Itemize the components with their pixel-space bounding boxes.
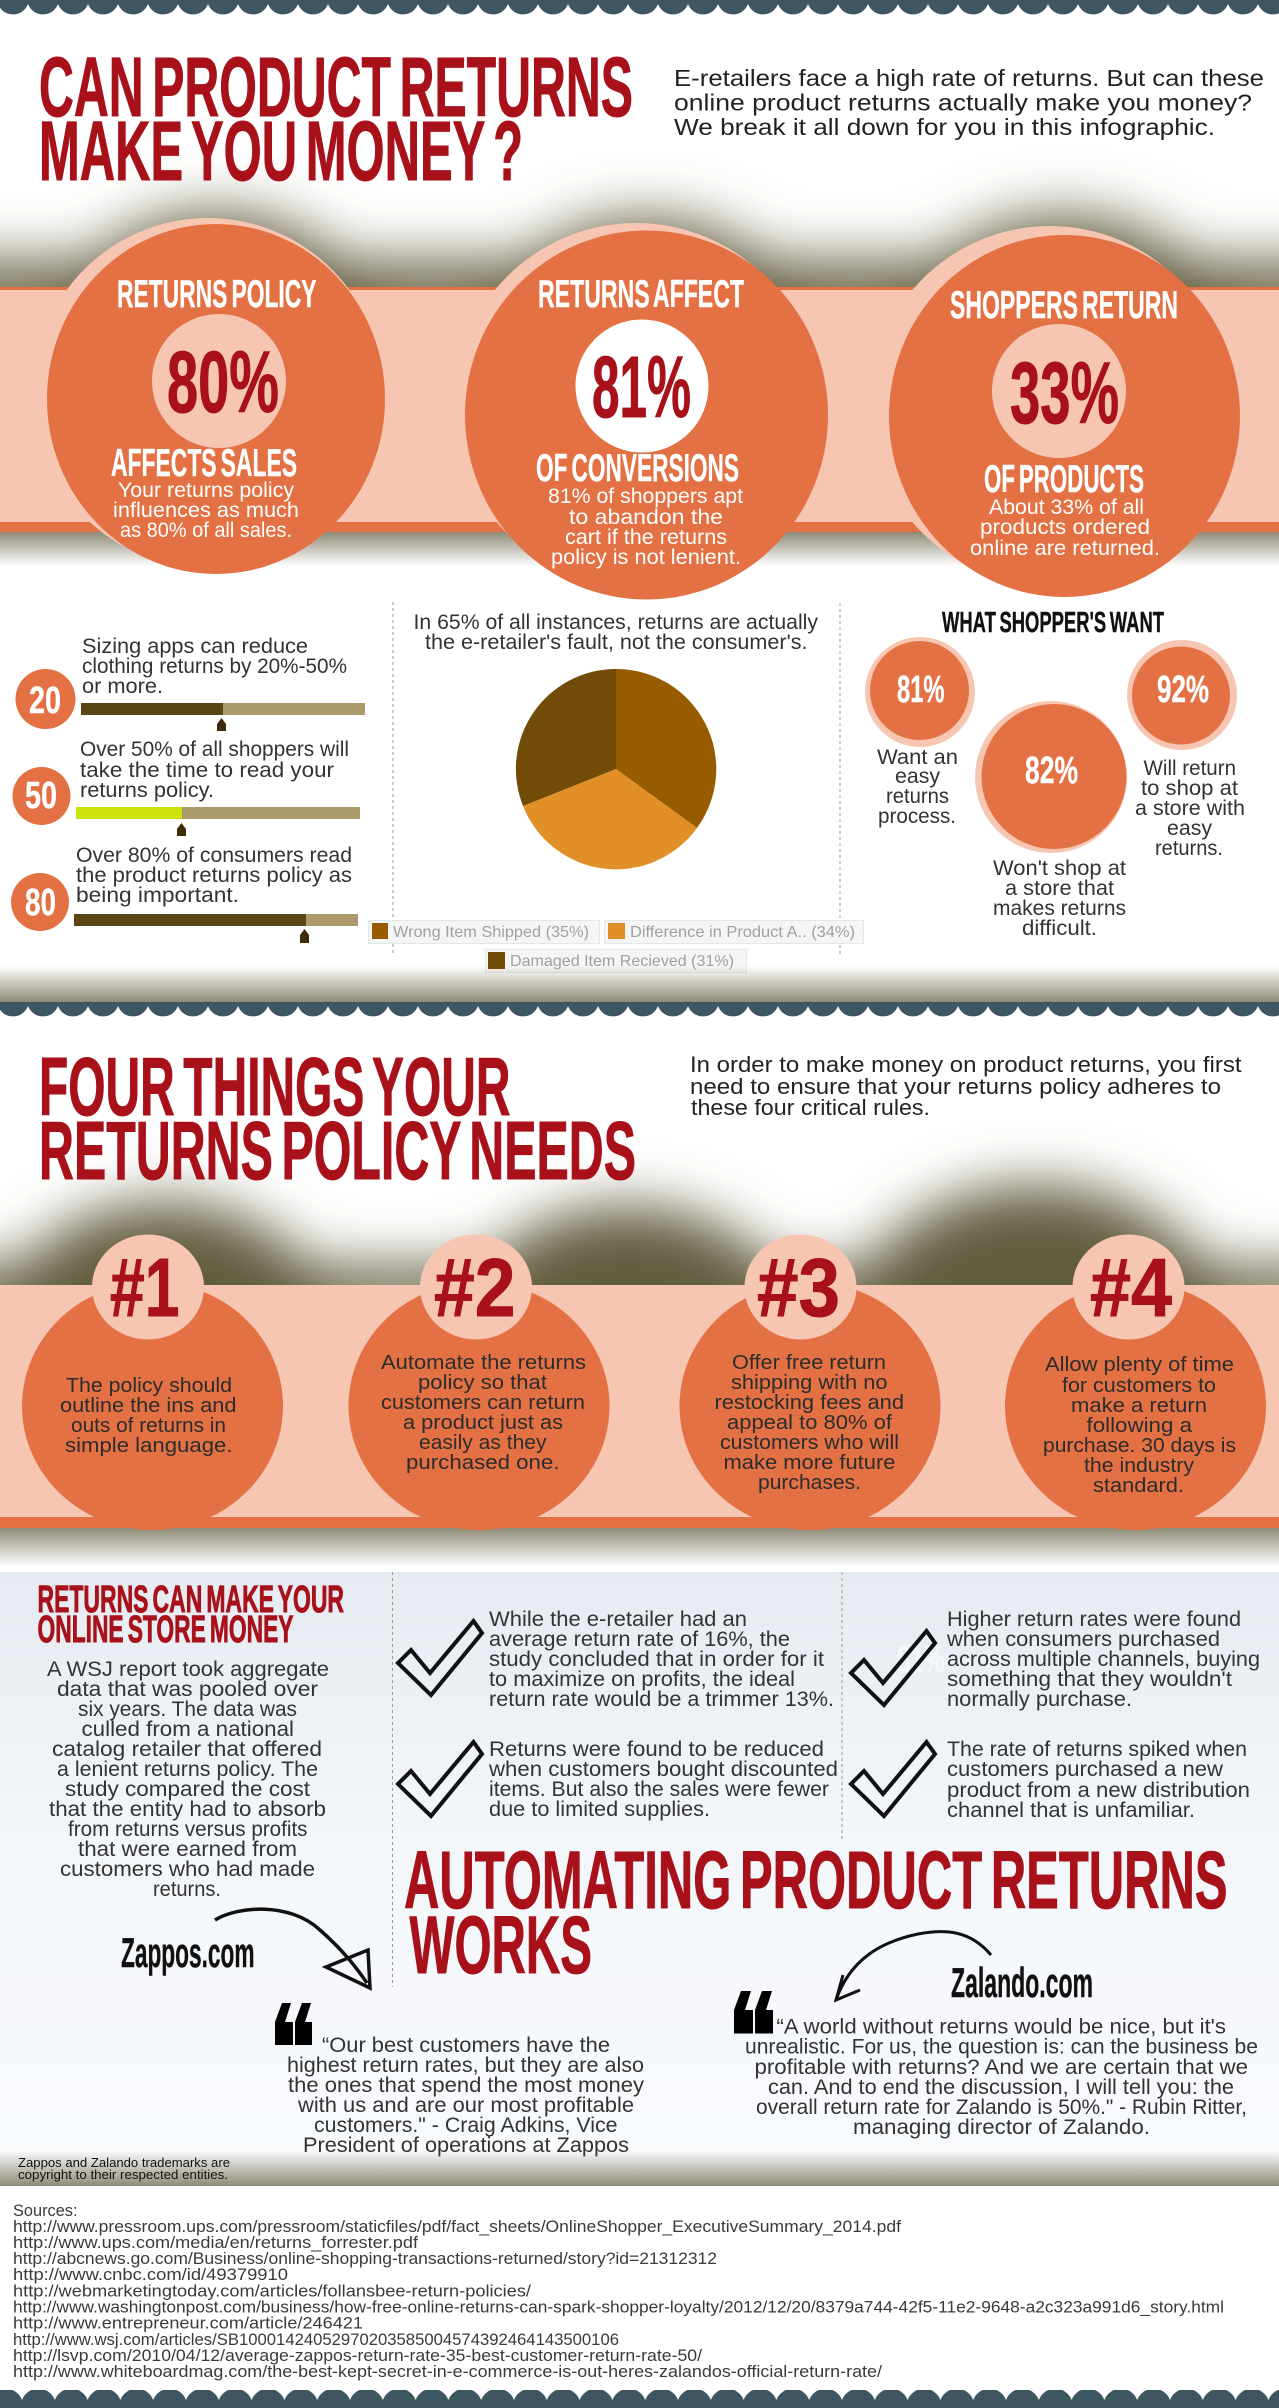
stats band: [0, 287, 1279, 532]
section intro text: [690, 1052, 1242, 1120]
scalloped divider: [0, 1002, 1279, 1018]
rule card 1: The policy should: [66, 1374, 232, 1397]
ghost numerals: [897, 1639, 1209, 1681]
rule card 1: #1: [110, 1241, 180, 1334]
trademark note: Zappos and Zalando trademarks are: [18, 2155, 230, 2170]
finding: multiple channels: [946, 1608, 1260, 1711]
rule card 4: #4: [1090, 1241, 1172, 1334]
stat bubble: 82%: [975, 701, 1127, 940]
finding: distribution channel: The rate of returns spiked when: [947, 1738, 1247, 1761]
stat bubble: 82%: Won't shop at: [993, 857, 1126, 880]
section title: four things: FOUR THINGS YOUR: [39, 1040, 510, 1133]
shadow below rules band: [0, 1528, 1279, 1566]
rule card 4: purchase. 30 days is: [1043, 1434, 1236, 1457]
finding: discounted items: Returns were found to be reduced: [489, 1738, 824, 1761]
stat row: sizing apps 20: or more.: [82, 675, 163, 698]
pie chart caption: [414, 611, 819, 654]
stat row: sizing apps 20: clothing returns by 20%-50%: [82, 655, 347, 678]
rule card 2: #2: [434, 1241, 516, 1334]
shadow above divider: [0, 966, 1279, 1002]
bottom scalloped border: [0, 2390, 1279, 2408]
stat bubble: 81%: [865, 637, 975, 828]
finding: return rate: average return rate of 16%, the: [489, 1628, 790, 1651]
section title: four things: RETURNS POLICY NEEDS: [39, 1104, 636, 1197]
WSJ report paragraph: a lenient returns policy. The: [57, 1758, 318, 1781]
Zappos quote: [287, 2034, 645, 2157]
Zappos quote: customers." - Craig Adkins, Vice: [314, 2114, 618, 2137]
Zalando quote: [745, 2016, 1258, 2139]
WSJ report paragraph: study compared the cost: [65, 1778, 310, 1801]
shadow below stats band: [0, 532, 1279, 566]
stat bubble: 92%: [1127, 640, 1245, 860]
rule card 4: following a: [1086, 1414, 1193, 1437]
rule card 4: make a return: [1071, 1394, 1207, 1417]
finding: discounted items: when customers bought discounted: [488, 1758, 838, 1781]
rules band: [0, 1285, 1279, 1528]
sources list: http://www.cnbc.com/id/49379910: [13, 2266, 288, 2284]
icon: check mark 4: [851, 1742, 935, 1816]
description: 81% of shoppers apt: [548, 485, 743, 508]
stat bubble: 92%: 92%: [1157, 669, 1209, 711]
finding: multiple channels: something that they wouldn't: [947, 1668, 1232, 1691]
rule card 4: for customers to: [1062, 1374, 1216, 1397]
main title: [39, 40, 633, 198]
stat bubble: 81%: Want an: [877, 746, 958, 769]
panel: shoppers return circle: [870, 226, 1240, 597]
sources list: http://lsvp.com/2010/04/12/average-zappos-return-rate-35-best-customer-return-rate-50/: [13, 2347, 702, 2365]
pie legend: Difference in Product A.. (34%): [630, 924, 855, 941]
finding: distribution channel: customers purchased a new: [947, 1758, 1224, 1781]
stat: 33%: [992, 324, 1126, 458]
finding: distribution channel: channel that is unfamiliar.: [947, 1799, 1195, 1822]
rule card 2: purchased one.: [406, 1451, 560, 1474]
top scalloped border: [0, 0, 1279, 16]
ghost numerals: 81%: [897, 1639, 944, 1681]
stat row: read policy 50: Over 50% of all shoppers will: [80, 738, 349, 761]
stat row: sizing apps 20: 20: [29, 680, 61, 722]
shadow above stats band: [0, 165, 1279, 287]
WSJ report paragraph: that were earned from: [78, 1838, 297, 1861]
heading: returns can make your online store money: ONLINE STORE MONEY: [38, 1609, 294, 1651]
heading: automating product returns works: WORKS: [410, 1900, 592, 1991]
stat bubble: 81%: process.: [878, 805, 956, 828]
finding: multiple channels: normally purchase.: [947, 1688, 1132, 1711]
panel: returns affect circle: [454, 223, 828, 600]
stat row: read policy 50: 50: [25, 775, 57, 817]
Zappos quote: the ones that spend the most money: [288, 2074, 645, 2097]
sources list: http://abcnews.go.com/Business/online-shopping-transactions-returned/story?id=21312312: [13, 2250, 717, 2268]
main title: CAN PRODUCT RETURNS: [39, 40, 633, 134]
sources list: Sources:: [13, 2202, 78, 2220]
rule card 3: appeal to 80% of: [727, 1411, 892, 1434]
stat row: read policy 50: returns policy.: [80, 779, 214, 802]
subheading: affects sales: AFFECTS SALES: [111, 442, 297, 485]
rule card 2: policy so that: [418, 1371, 547, 1394]
rule card 2: [348, 1234, 610, 1530]
stat row: consumers read 80: 80: [25, 882, 56, 924]
stat: 81%: [576, 320, 708, 452]
section intro text: these four critical rules.: [691, 1095, 930, 1120]
finding: discounted items: items. But also the sales were fewer: [489, 1778, 829, 1801]
Zalando quote: profitable with returns? And we are certain that we: [754, 2056, 1248, 2079]
stat bubble: 92%: returns.: [1155, 837, 1223, 860]
panel: returns policy circle: [33, 218, 385, 574]
stat row: consumers read 80: Over 80% of consumers read: [76, 844, 352, 867]
ghost numerals: 92%: [1157, 1639, 1209, 1681]
WSJ report paragraph: that the entity had to absorb: [49, 1798, 326, 1821]
stat bubble: 82%: 82%: [1025, 750, 1078, 792]
trademark note: [18, 2155, 230, 2182]
arrow: Zappos to quote: [215, 1909, 370, 1988]
label: Zappos.com: Zappos.com: [121, 1929, 254, 1976]
icon: check mark 2: [398, 1742, 482, 1816]
subheading: of products: OF PRODUCTS: [984, 458, 1144, 501]
stat row: consumers read 80: the product returns policy as: [76, 864, 352, 887]
WSJ report paragraph: customers who had made: [60, 1858, 315, 1881]
stat row: read policy 50: take the time to read your: [80, 759, 334, 782]
rule card 3: restocking fees and: [714, 1391, 904, 1414]
intro text: online product returns actually make you money?: [674, 90, 1252, 116]
Zalando quote: managing director of Zalando.: [853, 2116, 1150, 2139]
description: [113, 479, 299, 542]
WSJ report paragraph: data that was pooled over: [57, 1678, 318, 1701]
description: About 33% of all: [989, 496, 1144, 519]
subheading: of conversions: OF CONVERSIONS: [536, 447, 739, 490]
rule card 3: shipping with no: [731, 1371, 888, 1394]
icon: Zappos quote mark: [275, 2003, 312, 2045]
stat row: read policy 50: [12, 738, 360, 836]
finding: discounted items: due to limited supplies.: [489, 1798, 710, 1821]
intro text: We break it all down for you in this infographic.: [674, 114, 1215, 140]
description: to abandon the: [569, 506, 723, 529]
stat bubble: 82%: a store that: [1005, 877, 1114, 900]
sources list: http://www.ups.com/media/en/returns_forrester.pdf: [13, 2234, 418, 2252]
finding: return rate: study concluded that in order for it: [489, 1648, 824, 1671]
stat bubble: 92%: to shop at: [1141, 777, 1238, 800]
finding: distribution channel: product from a new distribution: [947, 1779, 1250, 1802]
sources list: [13, 2202, 1224, 2381]
rule card 4: [1005, 1234, 1266, 1530]
finding: distribution channel: [947, 1738, 1250, 1822]
finding: return rate: [489, 1608, 834, 1711]
pie chart caption: the e-retailer's fault, not the consumer's.: [425, 631, 808, 654]
WSJ report paragraph: A WSJ report took aggregate: [47, 1658, 329, 1681]
stat row: sizing apps 20: [16, 635, 365, 731]
heading: returns affect: RETURNS AFFECT: [538, 273, 744, 316]
stat bubble: 81%: easy: [895, 765, 941, 788]
rule card 2: a product just as: [403, 1411, 563, 1434]
stat row: sizing apps 20: Sizing apps can reduce: [82, 635, 308, 658]
pie legend: Wrong Item Shipped (35%): [393, 924, 589, 941]
stat bubble: 92%: a store with: [1135, 797, 1245, 820]
stat: 80%: [152, 314, 286, 448]
panel bottom shadow: [0, 2151, 1279, 2186]
heading: automating product returns works: [404, 1835, 1228, 1991]
icon: check mark 3: [851, 1631, 935, 1705]
stat bubble: 82%: difficult.: [1022, 917, 1097, 940]
Zappos quote: President of operations at Zappos: [303, 2134, 629, 2157]
rule card 2: customers can return: [381, 1391, 585, 1414]
description: influences as much: [113, 499, 299, 522]
description: cart if the returns: [565, 526, 727, 549]
rule card 2: easily as they: [419, 1431, 547, 1454]
rule card 1: outline the ins and: [60, 1394, 236, 1417]
rule card 3: purchases.: [758, 1471, 861, 1494]
Zalando quote: unrealistic. For us, the question is: can the business be: [745, 2036, 1258, 2058]
WSJ report paragraph: catalog retailer that offered: [52, 1738, 322, 1761]
sources list: http://webmarketingtoday.com/articles/follansbee-return-policies/: [13, 2282, 531, 2300]
description: [970, 496, 1160, 560]
sources list: http://www.washingtonpost.com/business/how-free-online-returns-can-spark-shopper-loyalty/2012/12/20/8379a744-42f5-11e2-9648-a2c323a991d6_story.html: [13, 2298, 1224, 2316]
stat: 33%: 33%: [1010, 345, 1119, 442]
finding: return rate: While the e-retailer had an: [489, 1608, 747, 1631]
WSJ report paragraph: from returns versus profits: [68, 1818, 308, 1841]
finding: discounted items: [488, 1738, 838, 1821]
intro text: E-retailers face a high rate of returns. But can these: [674, 65, 1264, 91]
WSJ report paragraph: returns.: [153, 1878, 221, 1901]
stat bubble: 81%: 81%: [897, 669, 944, 711]
stat row: consumers read 80: being important.: [76, 884, 239, 907]
rule card 2: Automate the returns: [381, 1351, 586, 1374]
icon: Zalando quote mark: [734, 1991, 773, 2034]
arrow: Zalando to quote: [836, 1932, 991, 2000]
description: policy is not lenient.: [551, 546, 741, 569]
heading: returns policy: RETURNS POLICY: [117, 273, 316, 316]
finding: multiple channels: when consumers purchased: [946, 1628, 1220, 1651]
sources list: http://www.whiteboardmag.com/the-best-kept-secret-in-e-commerce-is-out-heres-zalandos-official-return-rate/: [13, 2363, 882, 2381]
rule card 4: the industry: [1084, 1454, 1195, 1477]
rule card 3: customers who will: [720, 1431, 899, 1454]
stat: 80%: 80%: [167, 334, 279, 431]
WSJ report paragraph: six years. The data was: [78, 1698, 297, 1721]
rule card 1: [22, 1234, 283, 1530]
Zappos quote: with us and are our most profitable: [297, 2094, 634, 2117]
Zalando quote: can. And to end the discussion, I will tell you: the: [768, 2076, 1234, 2099]
pie legend: [368, 920, 864, 972]
description: online are returned.: [970, 537, 1160, 560]
section intro text: In order to make money on product returns, you first: [690, 1052, 1242, 1077]
panel: research background: [0, 1572, 1279, 2189]
finding: return rate: return rate would be a trimmer 13%.: [489, 1688, 834, 1711]
description: [548, 485, 743, 569]
Zappos quote: highest return rates, but they are also: [287, 2054, 644, 2077]
rule card 3: #3: [757, 1241, 840, 1334]
pie legend: Damaged Item Recieved (31%): [510, 953, 734, 970]
pie chart caption: In 65% of all instances, returns are actually: [414, 611, 819, 634]
label: Zalando.com: Zalando.com: [951, 1959, 1093, 2006]
sources list: http://www.pressroom.ups.com/pressroom/staticfiles/pdf/fact_sheets/OnlineShopper_ExecutiveSummary_2014.pdf: [13, 2218, 901, 2236]
sources list: http://www.wsj.com/articles/SB10001424052970203585004574392464143500106: [13, 2331, 619, 2349]
stat bubble: 82%: makes returns: [993, 897, 1126, 920]
rule card 4: Allow plenty of time: [1045, 1353, 1234, 1376]
sources list: http://www.entrepreneur.com/article/246421: [13, 2314, 363, 2332]
finding: multiple channels: across multiple channels, buying: [947, 1648, 1260, 1671]
stat bubble: 92%: easy: [1167, 817, 1213, 840]
Zappos quote: “Our best customers have the: [322, 2034, 610, 2057]
rule card 1: simple language.: [65, 1434, 232, 1457]
WSJ report paragraph: [47, 1658, 329, 1901]
rule card 3: make more future: [724, 1451, 896, 1474]
rule card 4: standard.: [1093, 1474, 1184, 1497]
finding: multiple channels: Higher return rates were found: [947, 1608, 1241, 1631]
trademark note: copyright to their respected entities.: [18, 2167, 228, 2182]
rule card 3: [680, 1234, 940, 1530]
stat: 81%: 81%: [592, 339, 691, 436]
heading: returns can make your online store money: RETURNS CAN MAKE YOUR: [38, 1579, 344, 1621]
main title: MAKE YOU MONEY ?: [39, 104, 523, 198]
WSJ report paragraph: culled from a national: [82, 1718, 294, 1741]
shadow above rules band: [0, 1138, 1279, 1285]
icon: check mark 1: [398, 1621, 482, 1695]
description: as 80% of all sales.: [120, 519, 292, 542]
stat bubble: 92%: Will return: [1144, 757, 1236, 780]
description: products ordered: [980, 516, 1150, 539]
heading: returns can make your online store money: [38, 1579, 344, 1651]
rule card 3: Offer free return: [732, 1351, 886, 1374]
description: Your returns policy: [118, 479, 294, 502]
finding: return rate: to maximize on profits, the ideal: [489, 1668, 795, 1691]
section intro text: need to ensure that your returns policy adheres to: [690, 1074, 1221, 1099]
rule card 1: outs of returns in: [71, 1414, 226, 1437]
Zalando quote: “A world without returns would be nice, but it's: [776, 2016, 1226, 2038]
section title: four things: [39, 1040, 636, 1197]
Zalando quote: overall return rate for Zalando is 50%." - Rubin Ritter,: [756, 2096, 1247, 2119]
intro text: [674, 65, 1264, 140]
stat bubble: 81%: returns: [886, 785, 949, 808]
stat row: consumers read 80: [11, 844, 358, 943]
pie chart: [516, 669, 716, 869]
